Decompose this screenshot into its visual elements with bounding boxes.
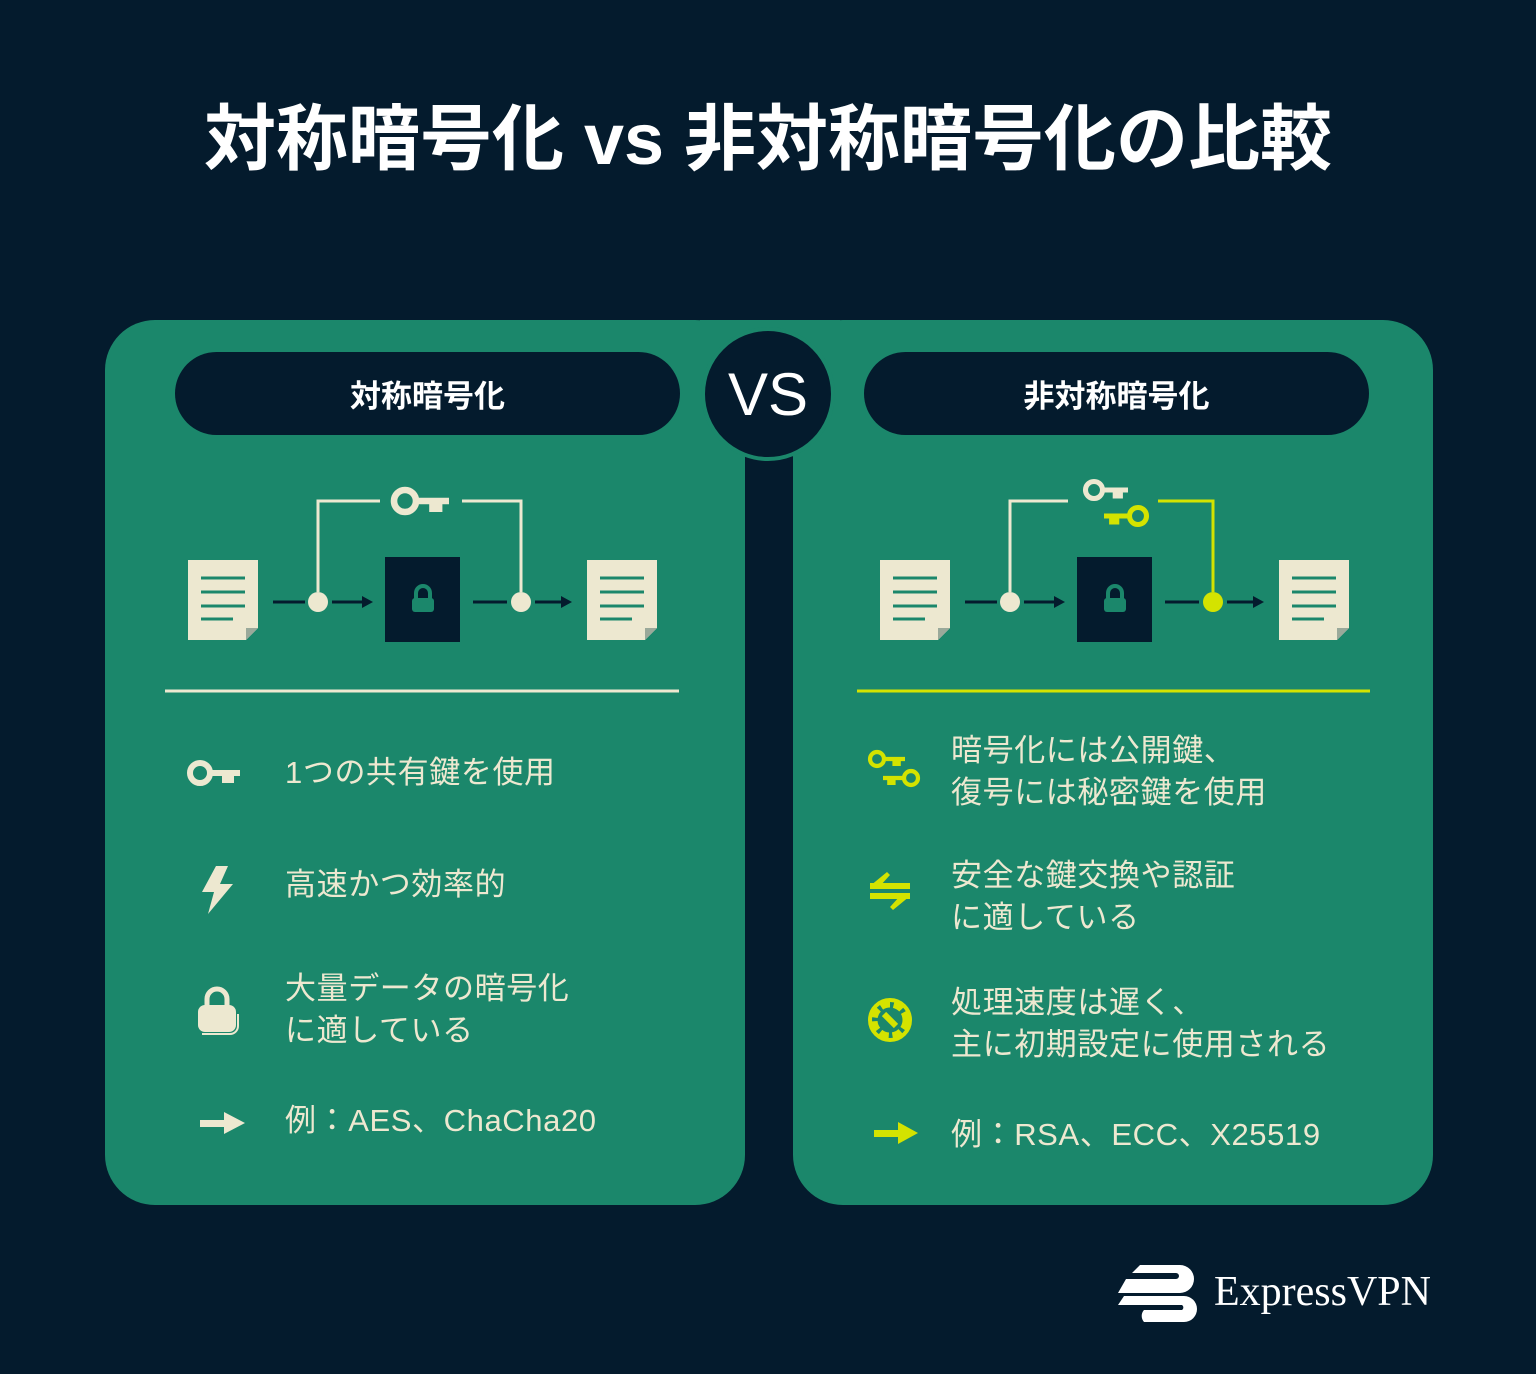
text: に適している (951, 900, 1140, 935)
VS badge (701, 327, 835, 461)
logo text: ExpressVPN (1214, 1269, 1431, 1315)
VS badge: VS (728, 360, 808, 428)
text: 大量データの暗号化 (285, 971, 569, 1006)
text: 高速かつ効率的 (285, 867, 506, 902)
text: 例：AES、ChaCha20 (285, 1103, 597, 1138)
panel: asymmetric (793, 320, 1433, 1205)
heading: symmetric (175, 352, 680, 435)
heading: asymmetric: 非対称暗号化 (1024, 379, 1210, 414)
icon: gear wrench (870, 1000, 910, 1040)
diagram: asymmetric (880, 482, 1349, 642)
icon: bolt (202, 866, 233, 914)
panel: symmetric (105, 320, 745, 1205)
icon: key (190, 763, 240, 783)
icon: exchange (870, 872, 910, 910)
right text items (951, 733, 1267, 810)
left text items: 1つの共有鍵を使用 (285, 755, 556, 790)
logo mark (1118, 1265, 1197, 1322)
icon: arrow right (874, 1122, 918, 1144)
icon: two keys (870, 752, 918, 785)
heading: asymmetric (864, 352, 1369, 435)
text: 処理速度は遅く、 (951, 985, 1204, 1020)
right text items: 復号には秘密鍵を使用 (951, 775, 1267, 810)
text: 主に初期設定に使用される (951, 1027, 1330, 1062)
text: 例：RSA、ECC、X25519 (951, 1117, 1321, 1152)
heading: symmetric: 対称暗号化 (350, 379, 505, 414)
title: 対称暗号化 vs 非対称暗号化の比較 (204, 100, 1332, 180)
text: に適している (285, 1013, 474, 1048)
icon: arrow left (200, 1112, 245, 1134)
text: 安全な鍵交換や認証 (951, 858, 1235, 893)
diagram: symmetric (188, 490, 657, 642)
right text items: 暗号化には公開鍵、 (951, 733, 1235, 768)
icon: lock (198, 989, 238, 1034)
